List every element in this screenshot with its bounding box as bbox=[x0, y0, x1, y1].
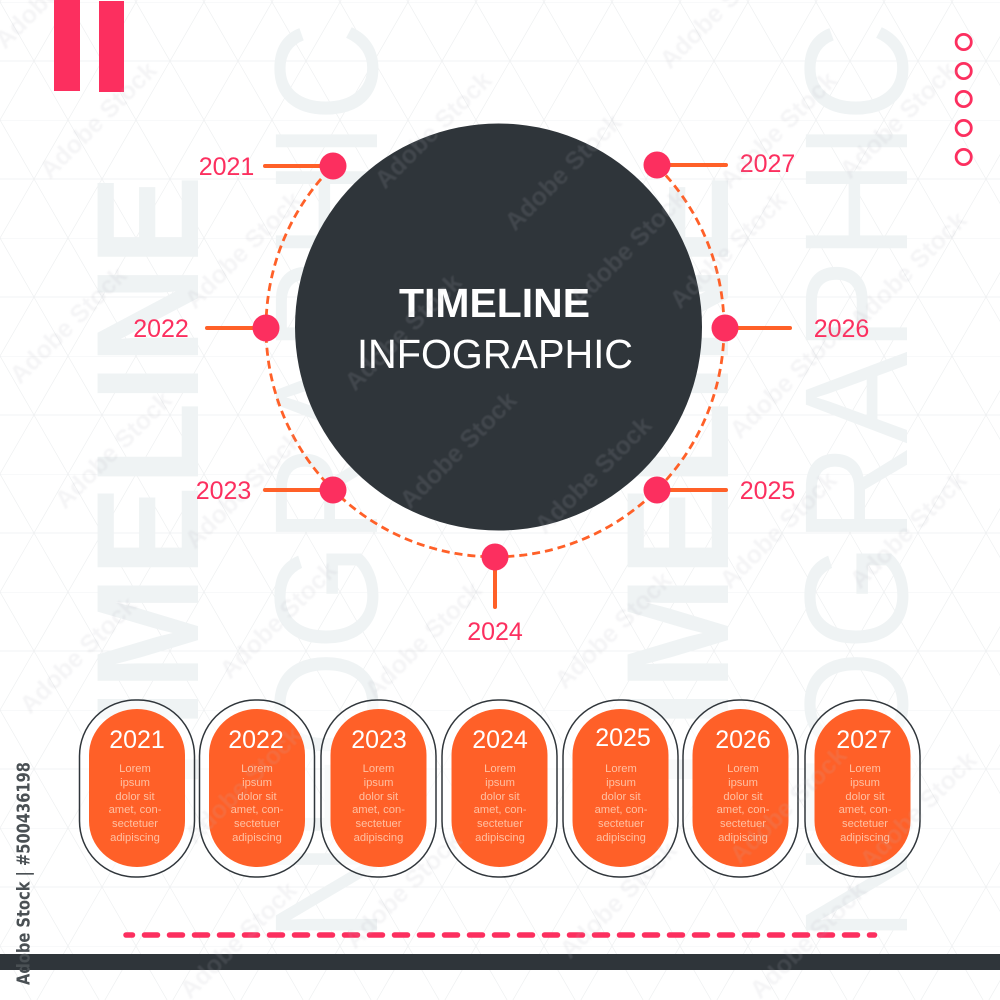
card 2023: sectetuer bbox=[355, 818, 402, 830]
card 2022: sectetuer bbox=[234, 818, 280, 830]
decorative rings bbox=[956, 34, 971, 165]
background lettering bbox=[98, 28, 908, 930]
card 2027: 2027 bbox=[836, 726, 892, 754]
card 2025: 2025 bbox=[595, 724, 651, 752]
marker 2022: 2022 bbox=[133, 315, 189, 343]
card 2024: Lorem bbox=[484, 763, 516, 775]
card 2027: dolor sit bbox=[845, 791, 885, 803]
watermarks: Adobe Stock bbox=[14, 591, 142, 719]
card 2023: Lorem bbox=[363, 763, 394, 775]
watermarks: Adobe Stock bbox=[844, 206, 972, 334]
card 2027: amet, con- bbox=[839, 804, 892, 816]
card 2023: adipiscing bbox=[354, 832, 403, 844]
card 2024 bbox=[442, 700, 557, 877]
marker 2025: 2025 bbox=[740, 477, 795, 505]
card 2021: adipiscing bbox=[110, 832, 160, 844]
card 2027: adipiscing bbox=[840, 832, 890, 844]
watermarks: Adobe Stock bbox=[854, 746, 982, 874]
card 2023: amet, con- bbox=[352, 804, 405, 816]
card 2024: dolor sit bbox=[480, 791, 520, 803]
central circle bbox=[295, 124, 702, 530]
watermarks: Adobe Stock bbox=[664, 186, 792, 314]
watermarks: Adobe Stock bbox=[724, 316, 852, 444]
title: INFOGRAPHIC bbox=[357, 331, 633, 377]
marker 2026: 2026 bbox=[814, 315, 869, 343]
card 2022 bbox=[200, 700, 314, 877]
stock id text: Adobe Stock | #500436198 bbox=[14, 762, 34, 985]
card 2022: Lorem bbox=[241, 763, 273, 775]
watermarks: Adobe Stock bbox=[394, 386, 522, 514]
card 2027 bbox=[805, 700, 920, 877]
marker 2022 bbox=[133, 314, 280, 343]
card 2024: amet, con- bbox=[474, 804, 527, 816]
card 2027: sectetuer bbox=[842, 818, 888, 830]
watermarks: Adobe Stock bbox=[214, 556, 342, 684]
card 2026: Lorem bbox=[727, 763, 759, 775]
card 2021 bbox=[80, 700, 194, 877]
watermarks: Adobe Stock bbox=[369, 66, 497, 194]
card 2026: dolor sit bbox=[723, 791, 763, 803]
card 2024: adipiscing bbox=[475, 832, 525, 844]
marker 2021 bbox=[199, 152, 346, 181]
marker 2026 bbox=[712, 314, 869, 343]
title bbox=[357, 280, 633, 377]
card 2025: sectetuer bbox=[598, 818, 644, 830]
card 2026: adipiscing bbox=[718, 832, 768, 844]
title: TIMELINE bbox=[399, 280, 590, 326]
card 2022: ipsum bbox=[242, 777, 272, 789]
watermarks: Adobe Stock bbox=[844, 466, 972, 594]
watermarks: Adobe Stock bbox=[49, 386, 177, 514]
card 2021: amet, con- bbox=[109, 804, 162, 816]
card 2023: dolor sit bbox=[359, 791, 399, 803]
card 2026: amet, con- bbox=[717, 804, 770, 816]
watermarks: Adobe Stock bbox=[499, 108, 627, 236]
card 2025 bbox=[563, 700, 678, 877]
dashed timeline arc bbox=[266, 166, 724, 557]
card 2024: ipsum bbox=[485, 777, 515, 789]
card 2025: Lorem bbox=[605, 763, 637, 775]
watermarks: Adobe Stock bbox=[554, 836, 682, 964]
card 2027: Lorem bbox=[849, 763, 881, 775]
watermarks: Adobe Stock bbox=[714, 466, 842, 594]
card 2026: sectetuer bbox=[720, 818, 766, 830]
card 2025: adipiscing bbox=[596, 832, 646, 844]
card 2024: 2024 bbox=[472, 726, 528, 754]
marker 2027: 2027 bbox=[740, 150, 795, 178]
card 2023: ipsum bbox=[364, 777, 393, 789]
card 2022: 2022 bbox=[228, 726, 284, 754]
card 2021: sectetuer bbox=[112, 818, 158, 830]
footer bar bbox=[0, 954, 1000, 970]
card 2023: 2023 bbox=[351, 726, 407, 754]
card 2021: dolor sit bbox=[115, 791, 155, 803]
marker 2025 bbox=[644, 476, 795, 505]
watermarks: Adobe Stock bbox=[529, 411, 657, 539]
card 2026 bbox=[683, 700, 798, 877]
watermarks: Adobe Stock bbox=[339, 268, 467, 396]
card 2023 bbox=[321, 700, 436, 877]
watermarks: Adobe Stock bbox=[549, 566, 677, 694]
marker 2023: 2023 bbox=[196, 477, 251, 505]
background lettering: TIMELINE bbox=[66, 175, 229, 811]
card 2025: ipsum bbox=[606, 777, 636, 789]
watermarks: Adobe Stock bbox=[714, 66, 842, 194]
watermarks: Adobe Stock bbox=[179, 721, 307, 849]
dashed pink rule bbox=[126, 932, 874, 938]
watermarks: Adobe Stock bbox=[4, 261, 132, 389]
card 2021: 2021 bbox=[109, 726, 165, 754]
watermarks: Adobe Stock bbox=[724, 741, 852, 869]
marker 2027 bbox=[644, 150, 795, 178]
card 2025: dolor sit bbox=[601, 791, 641, 803]
marker 2024: 2024 bbox=[467, 618, 523, 646]
watermarks: Adobe Stock bbox=[179, 186, 307, 314]
card 2025: amet, con- bbox=[595, 804, 648, 816]
card 2022: amet, con- bbox=[231, 804, 284, 816]
background lettering: TIMELINE bbox=[596, 175, 759, 811]
card 2021: Lorem bbox=[119, 763, 151, 775]
decorative pink bars bbox=[54, 0, 124, 92]
marker 2021: 2021 bbox=[199, 153, 254, 181]
marker 2024 bbox=[467, 544, 523, 646]
watermarks: Adobe Stock bbox=[34, 56, 162, 184]
card 2026: ipsum bbox=[728, 777, 758, 789]
marker 2023 bbox=[196, 476, 346, 505]
card 2026: 2026 bbox=[715, 726, 771, 754]
watermarks: Adobe Stock bbox=[359, 576, 487, 704]
watermarks: Adobe Stock bbox=[564, 184, 692, 312]
card 2021: ipsum bbox=[120, 777, 150, 789]
card 2022: adipiscing bbox=[232, 832, 282, 844]
card 2024: sectetuer bbox=[477, 818, 523, 830]
card 2027: ipsum bbox=[850, 777, 880, 789]
watermarks: Adobe Stock bbox=[179, 426, 307, 554]
card 2022: dolor sit bbox=[237, 791, 277, 803]
watermarks: Adobe Stock bbox=[834, 56, 962, 184]
watermarks: Adobe Stock bbox=[339, 826, 467, 954]
